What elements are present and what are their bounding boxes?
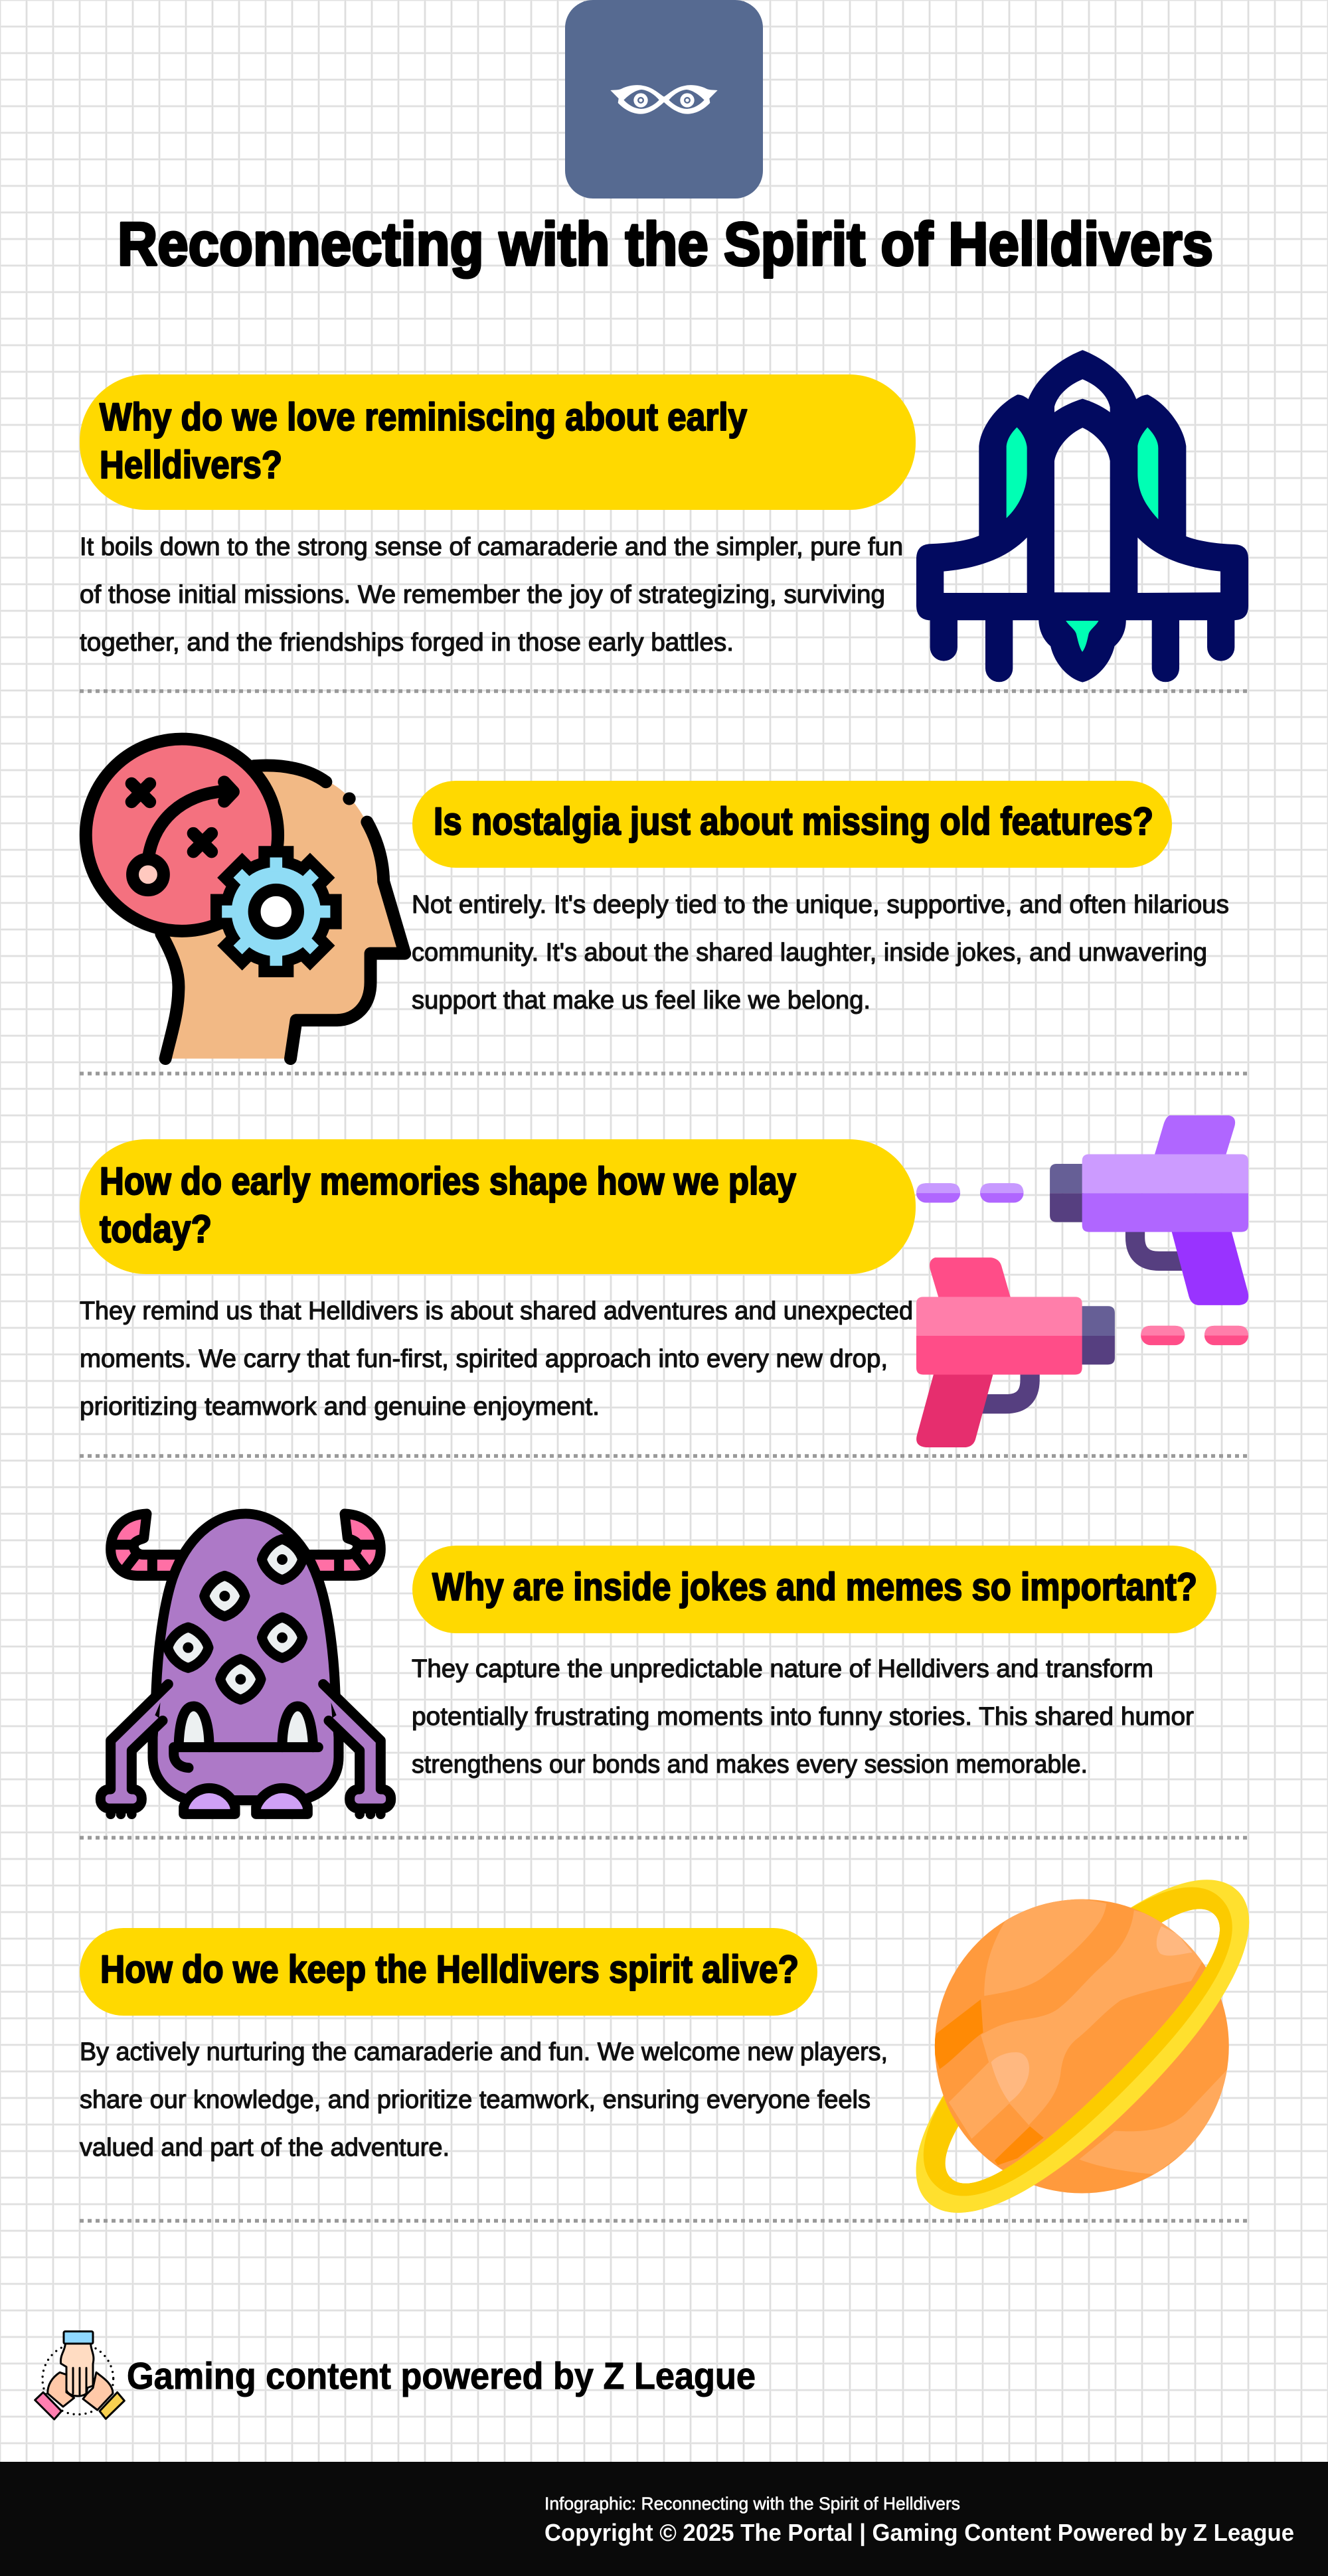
heading pill <box>412 781 1172 868</box>
footer copyright: Copyright © 2025 The Portal | Gaming Content Powered by Z League <box>544 2519 1294 2547</box>
icon: rocket <box>916 350 1248 683</box>
body text: It boils down to the strong sense of camaraderie and the simpler, pure fun <box>80 533 903 561</box>
icon: ray guns <box>916 1115 1248 1447</box>
body text: of those initial missions. We remember the joy of strategizing, surviving <box>80 581 885 609</box>
title: Reconnecting with the Spirit of Helldivers <box>118 210 1213 278</box>
body text: valued and part of the adventure. <box>80 2134 450 2162</box>
icon: ringed planet <box>916 1880 1250 2213</box>
powered by line <box>35 2332 756 2419</box>
heading pill: Why do we love reminiscing about early <box>100 396 747 439</box>
heading pill: How do we keep the Helldivers spirit alive? <box>100 1948 799 1991</box>
body text: community. It's about the shared laughter, inside jokes, and unwavering <box>412 939 1207 967</box>
body text: They capture the unpredictable nature of Helldivers and transform <box>412 1655 1153 1683</box>
icon: eyes logo <box>610 85 718 114</box>
body text: prioritizing teamwork and genuine enjoyment. <box>80 1393 600 1421</box>
heading pill <box>80 1139 916 1274</box>
body text: support that make us feel like we belong. <box>412 987 871 1014</box>
heading pill: Is nostalgia just about missing old features? <box>434 800 1153 843</box>
heading pill <box>80 1928 817 2016</box>
body text: potentially frustrating moments into funny stories. This shared humor <box>412 1703 1194 1731</box>
panel: keep the spirit alive <box>80 1880 1250 2213</box>
body text: Not entirely. It's deeply tied to the unique, supportive, and often hilarious <box>412 891 1229 919</box>
panel: why we love reminiscing <box>80 350 1248 683</box>
body text: share our knowledge, and prioritize teamwork, ensuring everyone feels <box>80 2086 871 2114</box>
body text <box>80 2038 888 2162</box>
body text: moments. We carry that fun-first, spirited approach into every new drop, <box>80 1345 888 1373</box>
footer caption: Infographic: Reconnecting with the Spirit of Helldivers <box>544 2494 960 2514</box>
heading pill: How do early memories shape how we play <box>100 1160 796 1203</box>
heading pill: today? <box>100 1208 212 1251</box>
heading pill <box>412 1546 1216 1633</box>
body text: By actively nurturing the camaraderie and fun. We welcome new players, <box>80 2038 888 2066</box>
heading pill <box>80 374 916 510</box>
body text: together, and the friendships forged in those early battles. <box>80 629 734 657</box>
panel: nostalgia <box>86 739 1229 1059</box>
footer bar <box>0 2462 1328 2576</box>
panel: early memories <box>80 1115 1248 1447</box>
heading pill: Why are inside jokes and memes so important? <box>432 1566 1197 1609</box>
logo badge <box>565 0 763 199</box>
powered by text: Gaming content powered by Z League <box>127 2355 756 2397</box>
panel: inside jokes and memes <box>100 1514 1216 1819</box>
icon: three joined hands <box>35 2332 124 2419</box>
heading pill: Helldivers? <box>100 443 282 487</box>
body text <box>412 1655 1194 1779</box>
body text: They remind us that Helldivers is about shared adventures and unexpected <box>80 1297 913 1325</box>
icon: purple ray gun <box>916 1115 1248 1305</box>
body text <box>80 1297 913 1421</box>
icon: pink ray gun <box>916 1257 1248 1447</box>
icon: head with strategy and gear <box>86 739 405 1059</box>
body text <box>412 891 1229 1014</box>
body text: strengthens our bonds and makes every session memorable. <box>412 1751 1088 1779</box>
icon: purple monster <box>100 1514 391 1819</box>
body text <box>80 533 903 657</box>
